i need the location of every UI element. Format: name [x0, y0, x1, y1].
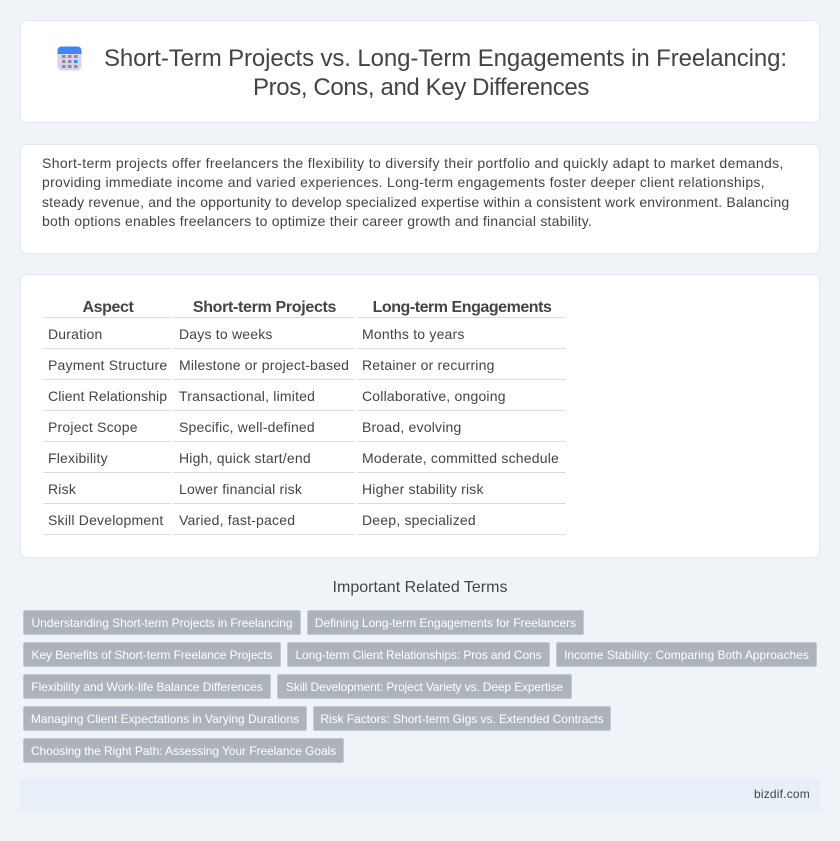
related terms tags: Skill Development: Project Variety vs. Deep Expertise [286, 680, 563, 694]
table rows: Flexibility [48, 450, 108, 466]
table rows: Specific, well-defined [179, 419, 315, 435]
intro text [42, 155, 789, 229]
table rows [48, 326, 559, 528]
related terms tags: Risk Factors: Short-term Gigs vs. Extended Contracts [320, 712, 604, 726]
table rows: Deep, specialized [362, 512, 476, 528]
table rows: Days to weeks [179, 326, 273, 342]
related terms tags: Flexibility and Work-life Balance Differences [31, 680, 263, 694]
related terms tags: Defining Long-term Engagements for Freelancers [315, 616, 576, 630]
title [104, 45, 787, 101]
intro text: providing immediate income and varied experiences. Long-term engagements foster deeper client relationships, [42, 174, 765, 190]
table rows: Payment Structure [48, 357, 167, 373]
table rows: Higher stability risk [362, 481, 484, 497]
related terms tags: Income Stability: Comparing Both Approaches [564, 648, 809, 662]
table rows: Varied, fast-paced [179, 512, 295, 528]
table rows: Retainer or recurring [362, 357, 495, 373]
related terms tags [23, 610, 817, 763]
table rows: Project Scope [48, 419, 138, 435]
icon: calendar [58, 46, 82, 70]
table rows: Skill Development [48, 512, 163, 528]
table rows: Client Relationship [48, 388, 167, 404]
related terms tags: Key Benefits of Short-term Freelance Projects [32, 648, 272, 662]
title: Pros, Cons, and Key Differences [253, 74, 589, 101]
table rows: Transactional, limited [179, 388, 315, 404]
table rows: Lower financial risk [179, 481, 302, 497]
table header: Long-term Engagements [373, 299, 551, 316]
intro text: Short-term projects offer freelancers the flexibility to diversify their portfolio and quickly adapt to market demands, [42, 155, 784, 171]
table rows: Collaborative, ongoing [362, 388, 506, 404]
related terms heading: Important Related Terms [333, 579, 507, 596]
table rows: Duration [48, 326, 103, 342]
title: Short-Term Projects vs. Long-Term Engagements in Freelancing: [104, 45, 787, 72]
footer source: bizdif.com [754, 787, 810, 801]
table rows: Months to years [362, 326, 465, 342]
table rows: Moderate, committed schedule [362, 450, 559, 466]
related terms tags: Long-term Client Relationships: Pros and Cons [295, 648, 542, 662]
panel: comparison table [20, 274, 820, 558]
panel: title card [20, 20, 820, 123]
intro text: both options enables freelancers to optimize their career growth and financial stability. [42, 213, 592, 229]
table rows: Milestone or project-based [179, 357, 349, 373]
table header [82, 299, 552, 316]
table rows: Risk [48, 481, 76, 497]
related terms tags: Understanding Short-term Projects in Freelancing [31, 616, 293, 630]
panel: intro card [20, 144, 820, 254]
related terms tags: Managing Client Expectations in Varying Durations [31, 712, 299, 726]
table header: Short-term Projects [193, 299, 336, 316]
table rows: High, quick start/end [179, 450, 311, 466]
intro text: steady revenue, and the opportunity to develop specialized expertise within a consistent work environment. Balancing [42, 194, 789, 210]
table header: Aspect [83, 299, 133, 316]
table rows: Broad, evolving [362, 419, 462, 435]
footer bar [20, 777, 820, 811]
related terms tags: Choosing the Right Path: Assessing Your Freelance Goals [31, 744, 336, 758]
